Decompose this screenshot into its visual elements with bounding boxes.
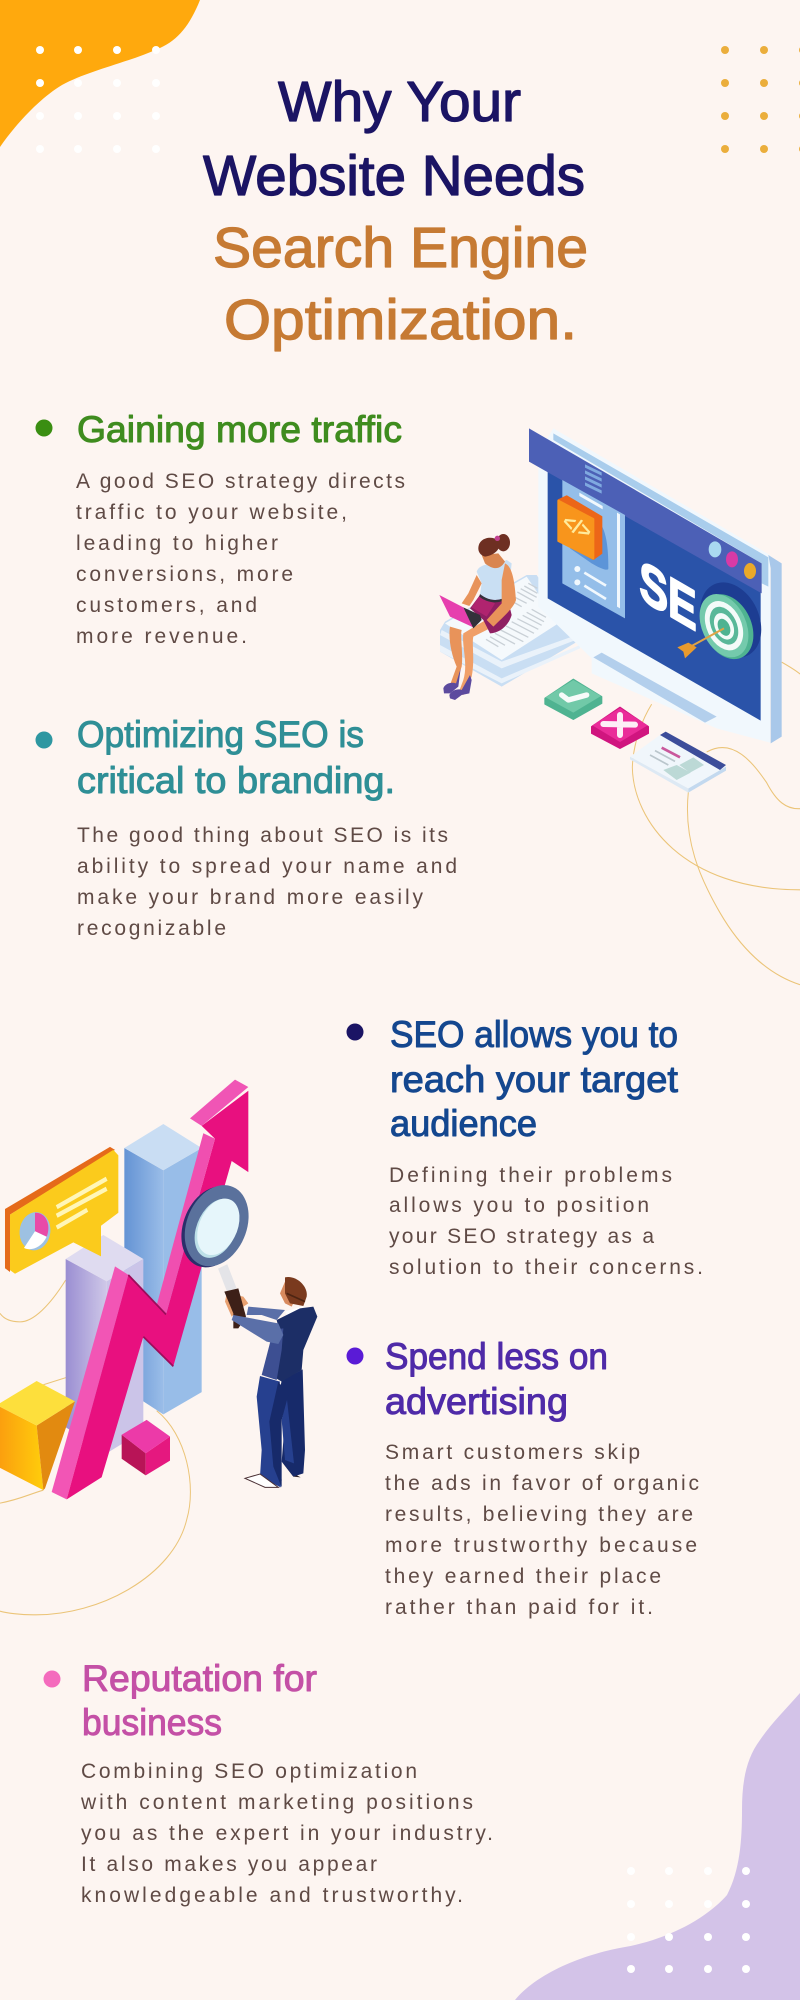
section: optimizing SEO: Optimizing SEO is xyxy=(77,714,364,755)
section: optimizing SEO: recognizable xyxy=(77,917,226,940)
section: reputation for business xyxy=(44,1658,493,1907)
blue bar xyxy=(124,1124,202,1414)
section: spend less on advertising: Smart customers skip xyxy=(385,1441,640,1464)
section: reach target audience: your SEO strategy as a xyxy=(389,1225,654,1248)
top-right dot grid xyxy=(721,46,800,153)
section: reputation for business: Combining SEO optimization xyxy=(81,1760,417,1783)
bullet xyxy=(44,1670,60,1688)
small browser card xyxy=(630,732,726,793)
decorative curves xyxy=(0,1280,190,1615)
section: spend less on advertising xyxy=(346,1336,699,1619)
icon: target with arrow xyxy=(677,572,773,668)
lavender corner blob xyxy=(515,1693,800,2000)
section: gaining more traffic: more revenue. xyxy=(76,625,247,648)
section: gaining more traffic: Gaining more traffic xyxy=(77,409,402,450)
section: optimizing SEO: The good thing about SEO is its xyxy=(77,824,448,847)
trousers xyxy=(245,1369,305,1487)
title: Optimization. xyxy=(224,288,577,352)
section: optimizing SEO: ability to spread your name and xyxy=(77,855,457,878)
section: reputation for business: Reputation for xyxy=(82,1658,317,1699)
speech card with pie chart xyxy=(5,1147,118,1274)
section: optimizing SEO xyxy=(36,714,457,940)
section: reputation for business: It also makes you appear xyxy=(81,1853,377,1876)
section: gaining more traffic: leading to higher xyxy=(76,532,278,555)
icon: code card xyxy=(558,496,602,559)
stack of papers xyxy=(440,575,580,687)
section: reputation for business: business xyxy=(82,1702,222,1743)
illustration: rising chart xyxy=(0,1080,261,1615)
decorative curves beside monitor xyxy=(632,662,800,985)
section: spend less on advertising: the ads in favor of organic xyxy=(385,1472,699,1495)
head xyxy=(280,1277,307,1307)
bullet xyxy=(346,1348,364,1364)
illustration: SEO monitor xyxy=(529,428,782,793)
section: spend less on advertising: results, believing they are xyxy=(385,1503,693,1526)
section: gaining more traffic: A good SEO strategy directs xyxy=(76,470,405,493)
magenta growth arrow xyxy=(52,1080,248,1499)
section: spend less on advertising: rather than paid for it. xyxy=(385,1596,653,1619)
orange corner blob xyxy=(0,0,200,147)
section: reach target audience: SEO allows you to xyxy=(390,1014,678,1055)
section: spend less on advertising: advertising xyxy=(385,1381,568,1422)
bullet xyxy=(36,420,52,436)
icon: check card xyxy=(545,679,602,719)
illustration: woman on stack of papers xyxy=(439,534,580,700)
section: reputation for business: knowledgeable and trustworthy. xyxy=(81,1884,463,1907)
monitor body xyxy=(529,428,782,743)
section: reputation for business: you as the expert in your industry. xyxy=(81,1822,493,1845)
bottom-right dot grid xyxy=(627,1867,750,1973)
title xyxy=(203,70,588,352)
purple bar xyxy=(66,1235,143,1453)
top-left dot grid xyxy=(36,46,160,153)
section: reach target audience: allows you to position xyxy=(389,1194,649,1217)
title: Why Your xyxy=(278,70,521,134)
section: reputation for business: with content marketing positions xyxy=(80,1791,473,1814)
section: reach target audience: solution to their concerns. xyxy=(389,1256,703,1279)
title: Website Needs xyxy=(203,144,585,208)
section: reach target audience: reach your target xyxy=(390,1059,679,1100)
magnifying glass xyxy=(169,1172,261,1290)
section: optimizing SEO: critical to branding. xyxy=(77,760,395,801)
bullet xyxy=(36,732,52,748)
section: reach target audience: audience xyxy=(390,1103,537,1144)
section: spend less on advertising: more trustworthy because xyxy=(385,1534,697,1557)
yellow cube xyxy=(0,1381,75,1490)
section: reach target audience: Defining their problems xyxy=(389,1164,672,1187)
woman xyxy=(439,534,516,700)
section: gaining more traffic: customers, and xyxy=(76,594,257,617)
section: gaining more traffic: traffic to your website, xyxy=(76,501,347,524)
section: gaining more traffic: conversions, more xyxy=(76,563,293,586)
SE lettering: SE xyxy=(639,547,697,643)
title: Search Engine xyxy=(213,216,588,280)
icon: code card: </> xyxy=(558,510,595,544)
businessman xyxy=(224,1277,317,1487)
jacket and arms xyxy=(224,1288,317,1382)
icon: cross card xyxy=(592,707,648,748)
window control dots xyxy=(709,541,756,579)
section: optimizing SEO: make your brand more easily xyxy=(77,886,424,909)
bullet xyxy=(346,1024,364,1040)
small magenta cube xyxy=(122,1420,170,1475)
section: spend less on advertising: Spend less on xyxy=(385,1336,608,1377)
section: reach target audience xyxy=(346,1014,703,1279)
section: spend less on advertising: they earned their place xyxy=(385,1565,661,1588)
section: gaining more traffic xyxy=(36,409,405,648)
